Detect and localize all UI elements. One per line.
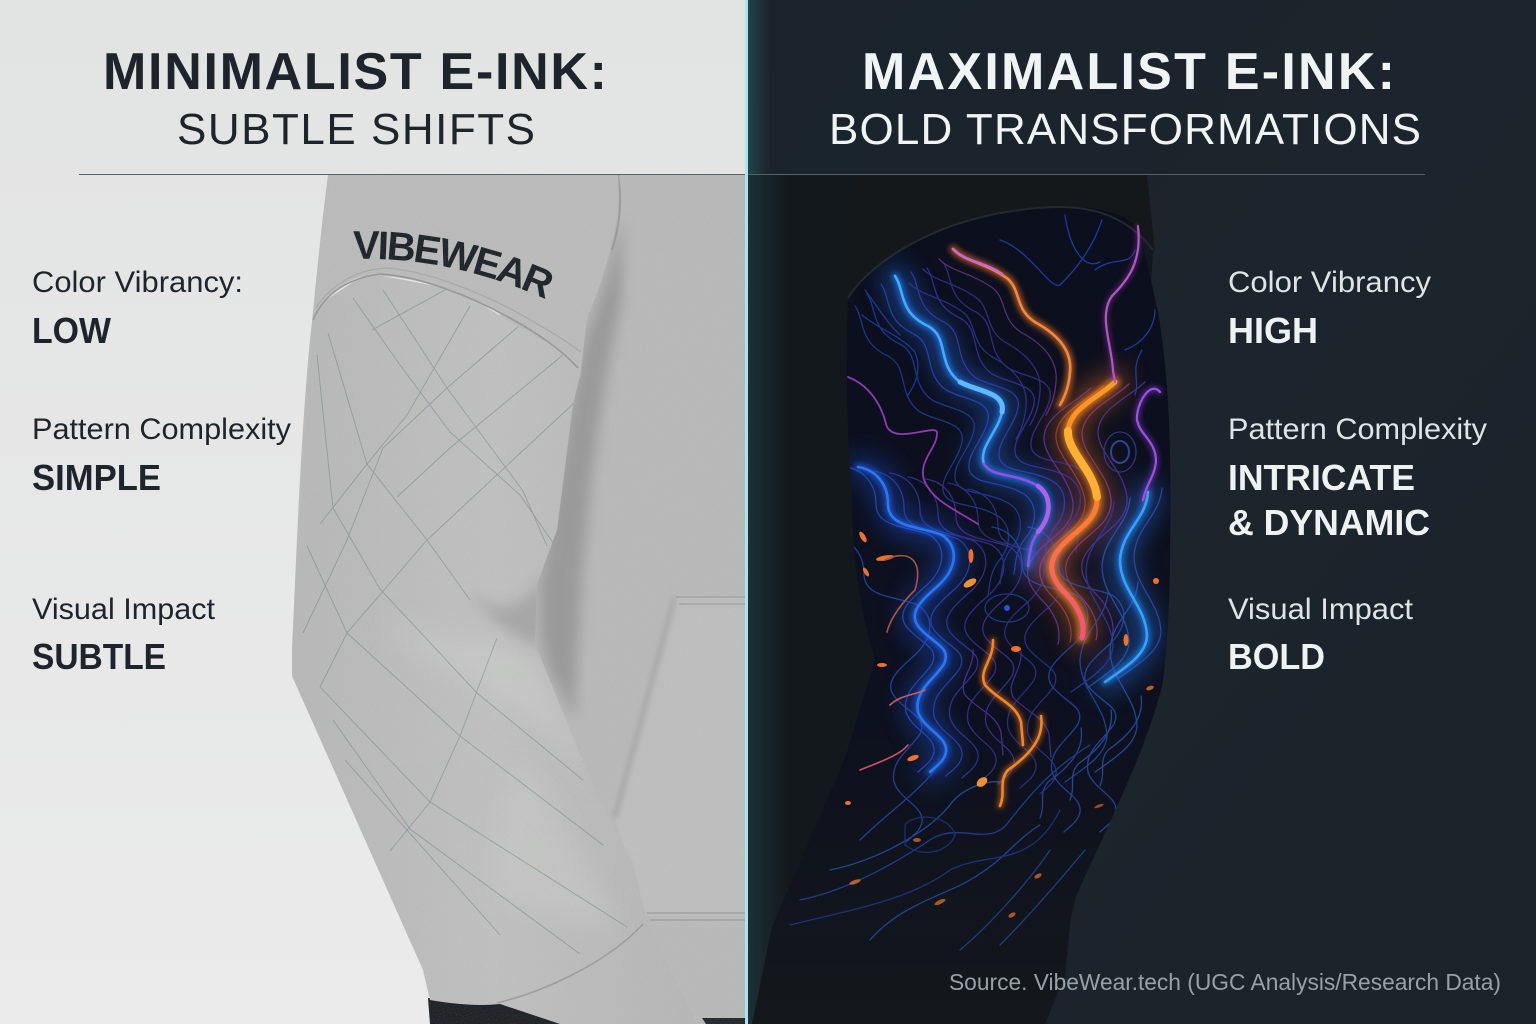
heading: left [103, 43, 607, 154]
glowing wave pattern [790, 215, 1162, 950]
black sleeve [752, 206, 1170, 1024]
metric: pattern complexity simple: Pattern Complexity [32, 413, 291, 446]
sleeve logo: VIBEWEAR [353, 231, 552, 299]
metrics: left column [32, 266, 291, 677]
sleeve cap with hem [312, 175, 619, 378]
metric: color vibrancy low [32, 266, 243, 351]
hoodie body [500, 175, 745, 1024]
metric: color vibrancy low: LOW [32, 310, 111, 351]
cuff seam [497, 924, 643, 1003]
metric: visual impact bold [1228, 593, 1414, 677]
metric: visual impact subtle: SUBTLE [32, 636, 166, 677]
black hoodie body [748, 175, 1153, 1024]
e-ink grid lines [303, 290, 627, 954]
metric: visual impact subtle: Visual Impact [32, 593, 216, 626]
metric: pattern complexity intricate and dynamic: & DYNAMIC [1228, 502, 1430, 543]
source note: Source. VibeWear.tech (UGC Analysis/Research Data) [949, 969, 1501, 995]
metrics: right column [1228, 266, 1487, 677]
soft glow layer [858, 276, 1148, 772]
metric: color vibrancy high: Color Vibrancy [1228, 266, 1431, 299]
pink and orange short strokes [860, 556, 925, 770]
dark waistband shadow at bottom edge [702, 1018, 745, 1024]
core neon lines [848, 226, 1160, 806]
hoodie sleeve arm [292, 275, 644, 1024]
noise texture on hoodie [331, 232, 744, 1024]
heading: right: BOLD TRANSFORMATIONS [829, 105, 1421, 154]
metric: color vibrancy low: Color Vibrancy: [32, 266, 243, 299]
elbow fold shading [481, 583, 537, 682]
header rule: right [748, 174, 1425, 175]
thin contour lines [790, 215, 1162, 950]
heading: right [829, 43, 1421, 154]
metric: color vibrancy high [1228, 266, 1431, 351]
trousers [428, 998, 560, 1024]
photo: black hoodie with vivid e-ink sleeve [748, 175, 1170, 1024]
header rule: left [79, 174, 745, 175]
heading: left: MINIMALIST E-INK: [103, 43, 607, 101]
metric: pattern complexity simple [32, 413, 291, 498]
metric: visual impact bold: Visual Impact [1228, 593, 1414, 626]
metric: pattern complexity intricate and dynamic [1228, 413, 1487, 543]
metric: pattern complexity intricate and dynamic: INTRICATE [1228, 457, 1415, 498]
orange sparks [845, 531, 1159, 919]
metric: pattern complexity simple: SIMPLE [32, 457, 161, 498]
sleeve hem seam [848, 207, 1153, 298]
heading: left: SUBTLE SHIFTS [177, 105, 535, 154]
metric: visual impact bold: BOLD [1228, 636, 1325, 677]
metric: pattern complexity intricate and dynamic: Pattern Complexity [1228, 413, 1487, 446]
divider: centre glowing line [745, 0, 748, 1024]
metric: color vibrancy high: HIGH [1228, 310, 1318, 351]
panel: right background [746, 0, 1536, 1024]
bright glow under core lines [858, 226, 1160, 806]
photo: grey hoodie with subtle e-ink sleeve [292, 175, 745, 1024]
sleeve cap [848, 175, 1155, 300]
hoodie pocket [615, 597, 745, 920]
metric: visual impact subtle [32, 593, 216, 677]
heading: right: MAXIMALIST E-INK: [862, 43, 1395, 101]
panel: left background [0, 0, 746, 1024]
